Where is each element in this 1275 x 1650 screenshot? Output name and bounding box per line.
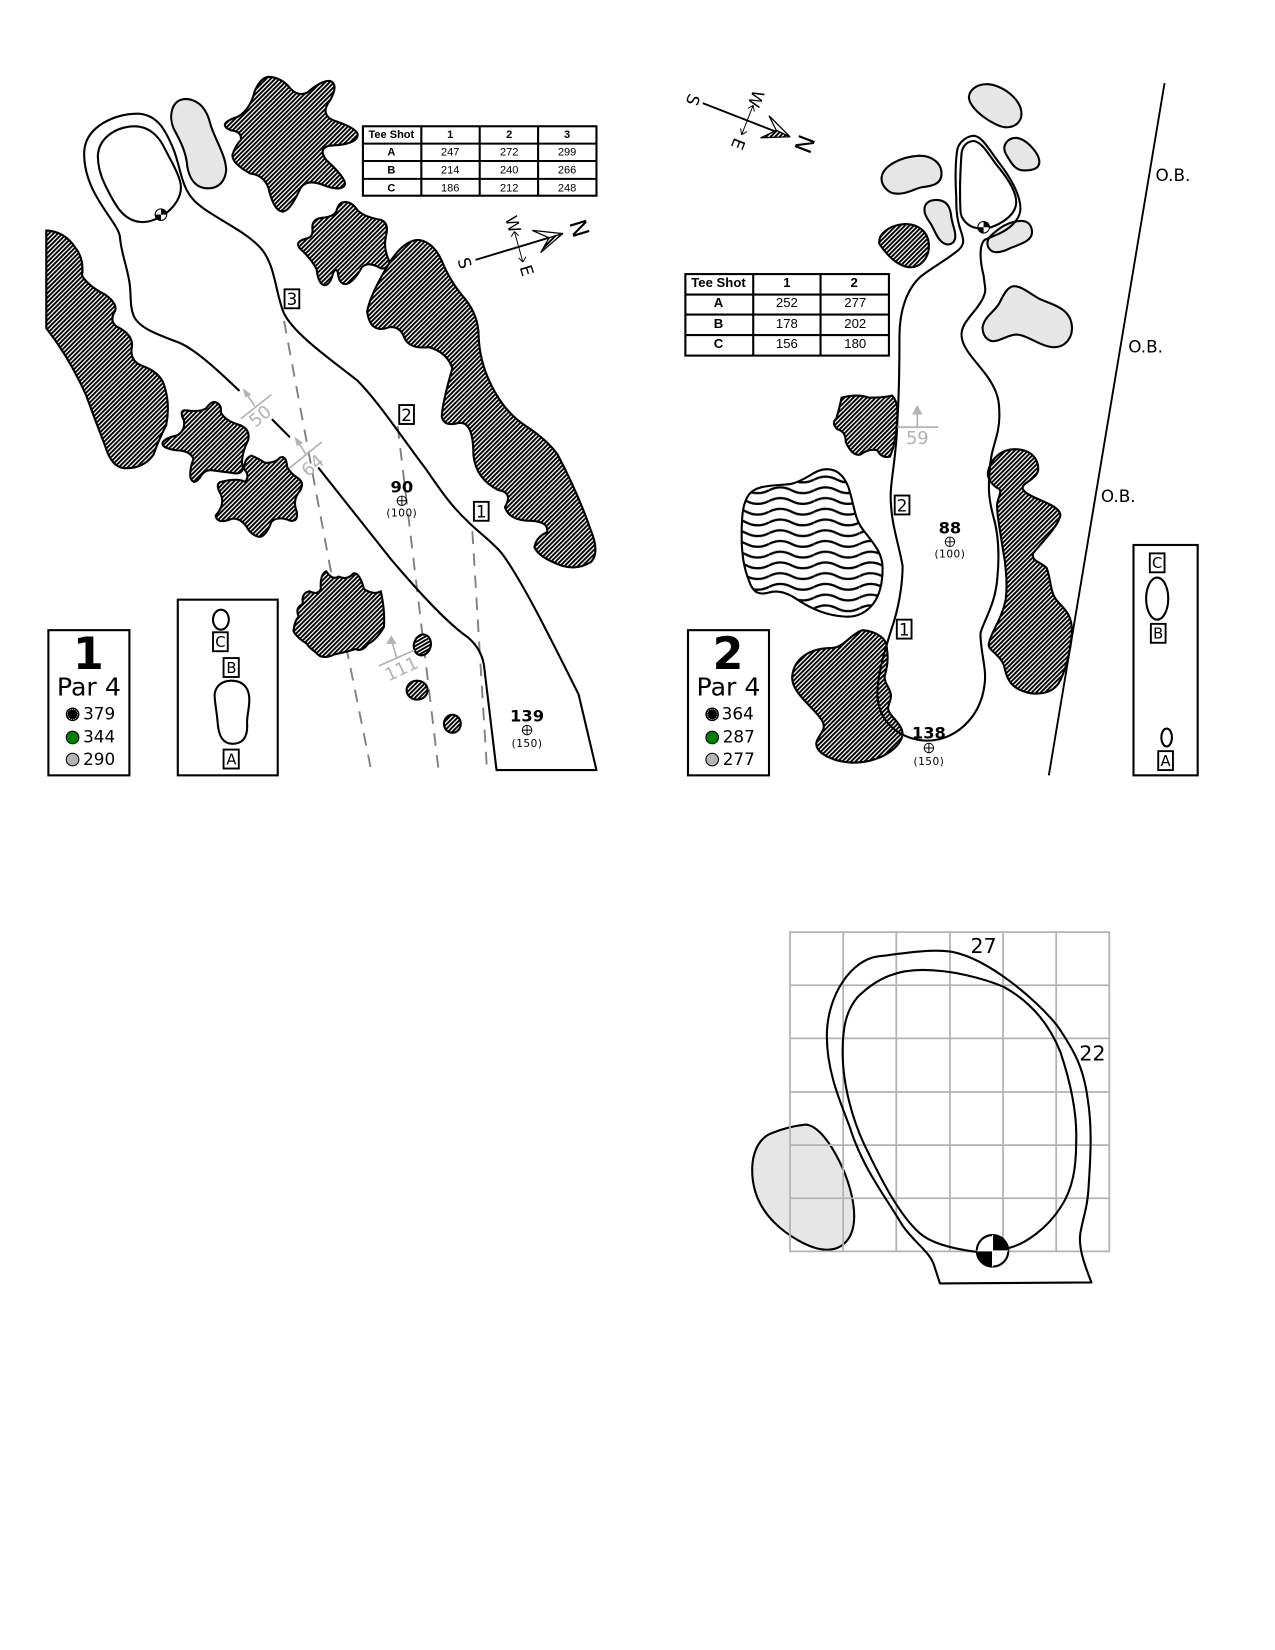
collar outline, detail [827, 951, 1091, 1283]
grey bunker, top [969, 84, 1021, 127]
tee shot marker 3: 3 [287, 289, 297, 309]
green depth 27: 27 [971, 934, 997, 958]
yardage 88 [935, 518, 965, 561]
tree: left star upper [163, 402, 249, 482]
trees: long right band [367, 240, 595, 567]
yardage 88: 88 [939, 518, 961, 537]
green detail [752, 932, 1109, 1283]
yardage 139 [510, 707, 544, 750]
grey bunker, hole 1 [171, 99, 226, 188]
tee shot marker 2: 2 [401, 405, 412, 425]
tee shot table, hole 2: C [714, 336, 724, 351]
hole 1 map [46, 77, 596, 775]
pin flag, hole 1 [155, 209, 167, 220]
trees right band [988, 449, 1072, 694]
compass, hole 2: E [727, 135, 749, 153]
legend, hole 1 [48, 629, 129, 775]
legend, hole 2: 277 [723, 749, 755, 769]
tee shot table, hole 2: 1 [783, 275, 791, 290]
tree beside fairway [834, 396, 897, 457]
distance marker 50 [241, 388, 276, 432]
grey bunker, narrow left of green [924, 200, 955, 244]
tee shot table, hole 1: A [387, 147, 395, 159]
tee shot table, hole 2: 180 [844, 336, 866, 351]
out of bounds label middle: O.B. [1128, 336, 1163, 356]
tee shot marker 1, hole 2: 1 [899, 619, 910, 639]
tee shot table, hole 2: 202 [844, 316, 866, 331]
tree: second star [298, 202, 389, 285]
compass, hole 1: N [563, 217, 593, 241]
tee box panel, hole 2: A [1161, 753, 1171, 770]
yardage 90: (100) [386, 508, 417, 520]
compass, hole 2: N [788, 131, 819, 156]
legend, hole 1: 1 [73, 629, 104, 680]
yardage 139: 139 [510, 707, 544, 726]
compass, hole 1: S [454, 255, 476, 271]
tee box panel, hole 2: C [1152, 555, 1162, 572]
tree: round lower [294, 571, 384, 657]
compass, hole 2: W [744, 87, 768, 110]
distance marker 111: 111 [382, 653, 422, 686]
fairway and collar outline, hole 2 [877, 136, 1020, 741]
green outline, detail [843, 970, 1076, 1252]
water hazard [742, 469, 883, 617]
green, hole 2 [960, 141, 1016, 228]
tee shot table, hole 1: 212 [500, 182, 518, 194]
yardage 88: (100) [935, 549, 965, 561]
compass, hole 1 [454, 213, 593, 278]
compass, hole 2 [682, 87, 819, 156]
yardage 138: 138 [912, 724, 946, 743]
tee shot table, hole 1: B [387, 165, 395, 177]
tee box panel, hole 1 [178, 600, 278, 775]
distance marker 59 [897, 405, 938, 449]
compass, hole 1: E [516, 262, 538, 278]
tee shot table, hole 2: 252 [776, 295, 798, 310]
yardage grid [790, 932, 1109, 1251]
yardage 138 [912, 724, 946, 768]
tee shot table, hole 1: 214 [441, 165, 459, 177]
out of bounds line [1049, 83, 1165, 775]
tee box panel, hole 2 [1134, 545, 1198, 775]
tee box panel, hole 2: B [1153, 626, 1163, 643]
grey bunker, right of green lower [987, 221, 1032, 252]
hole 2 map [682, 83, 1198, 775]
grey bunker, detail [752, 1125, 854, 1250]
tee shot marker 1: 1 [476, 502, 487, 522]
tee shot table, hole 1: Tee Shot [368, 129, 415, 141]
tee shot table, hole 1: C [387, 182, 395, 194]
tee shot table, hole 1 [363, 126, 596, 196]
trees: long left band [46, 230, 168, 468]
tee shot table, hole 1: 272 [500, 147, 518, 159]
legend, hole 1: 344 [83, 727, 115, 747]
grey bunker, large right [983, 286, 1072, 347]
pin flag, detail [977, 1235, 1008, 1267]
distance marker 59: 59 [906, 428, 929, 449]
tee shot table, hole 1: 266 [558, 165, 576, 177]
tee box panel, hole 1: C [215, 634, 226, 651]
tee shot table, hole 1: 2 [506, 129, 512, 141]
tree: top star [225, 77, 358, 212]
yardage 90: 90 [391, 477, 413, 496]
legend, hole 1: 379 [83, 704, 115, 724]
tree: left star lower [216, 456, 302, 537]
legend, hole 1: Par 4 [57, 672, 121, 701]
distance marker 111 [379, 635, 422, 686]
compass, hole 1: W [501, 213, 525, 235]
legend, hole 1: 290 [83, 749, 115, 769]
fairway and collar outline, hole 1 [84, 114, 596, 770]
tee shot table, hole 1: 299 [558, 147, 576, 159]
out of bounds label lower: O.B. [1101, 486, 1136, 506]
tee shot table, hole 1: 248 [558, 182, 576, 194]
tee shot table, hole 2: 156 [776, 336, 798, 351]
distance marker 50: 50 [245, 401, 276, 432]
small trees [407, 633, 461, 733]
yardage 90 [386, 477, 417, 520]
tree near green [879, 224, 929, 267]
tee box panel, hole 1: B [226, 660, 236, 677]
tee shot table, hole 2: 2 [851, 275, 858, 290]
tee shot table, hole 1: 240 [500, 165, 518, 177]
trees lower left [792, 630, 903, 763]
green width 22: 22 [1079, 1041, 1106, 1065]
distance marker 64 [289, 437, 329, 481]
distance marker 64: 64 [298, 451, 329, 481]
legend, hole 2: 364 [722, 704, 754, 724]
tee shot table, hole 2: 277 [844, 295, 866, 310]
grey bunker, left of green [882, 156, 942, 194]
yardage 139: (150) [512, 738, 542, 750]
yardage 138: (150) [913, 756, 944, 768]
tee box panel, hole 1: A [226, 751, 236, 768]
grey bunker, right of green upper [1004, 138, 1039, 170]
pin flag, hole 2 [978, 221, 989, 233]
legend, hole 2 [688, 629, 769, 775]
tee shot table, hole 2: A [714, 295, 724, 310]
tee shot table, hole 1: 186 [441, 182, 459, 194]
green, hole 1 [98, 126, 181, 222]
tee shot table, hole 2 [685, 274, 889, 356]
legend, hole 2: 287 [723, 727, 755, 747]
dashed tee shot lines, hole 1 [284, 321, 487, 771]
tee shot table, hole 1: 247 [441, 147, 459, 159]
tee shot table, hole 2: Tee Shot [691, 275, 746, 290]
tee shot table, hole 2: B [714, 316, 723, 331]
tee shot marker 2, hole 2: 2 [897, 495, 907, 515]
legend, hole 2: Par 4 [696, 672, 760, 701]
out of bounds label upper: O.B. [1156, 165, 1190, 185]
tee shot table, hole 1: 3 [564, 129, 570, 141]
legend, hole 2: 2 [713, 629, 743, 680]
tee shot table, hole 2: 178 [776, 316, 798, 331]
tee shot table, hole 1: 1 [447, 129, 453, 141]
compass, hole 2: S [682, 91, 704, 108]
